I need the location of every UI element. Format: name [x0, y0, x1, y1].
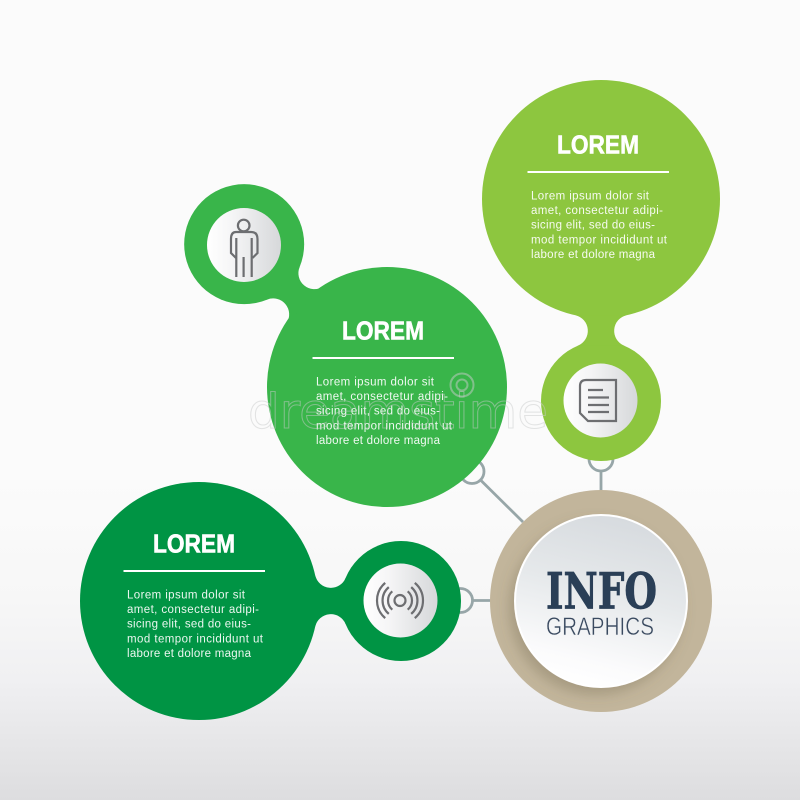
body text: Lorem ipsum dolor sit [316, 376, 435, 388]
body text: amet, consectetur adipi- [127, 604, 259, 616]
body text: labore et dolore magna [531, 249, 656, 261]
panel: central info hub [490, 490, 712, 712]
body text: Lorem ipsum dolor sit [127, 590, 246, 602]
body text: amet, consectetur adipi- [531, 205, 663, 217]
connector: left circle to hub [448, 588, 492, 612]
heading: LOREM [557, 129, 639, 159]
subtitle: GRAPHICS: GRAPHICS [546, 613, 654, 641]
body text [316, 376, 453, 447]
icon: person [207, 208, 281, 282]
panel: middle green node [117, 117, 557, 557]
body text: mod tempor incididunt ut [127, 633, 264, 645]
text block: bottom left [124, 528, 265, 660]
title: INFO: INFO [546, 562, 657, 620]
body text: mod tempor incididunt ut [531, 234, 668, 246]
body text: sicing elit, sed do eius- [127, 619, 251, 631]
panel: top right light green node [482, 80, 720, 461]
body text: labore et dolore magna [316, 435, 441, 447]
body text: mod tempor incididunt ut [316, 420, 453, 432]
panel: bottom left dark green node [80, 482, 461, 720]
body text: labore et dolore magna [127, 648, 252, 660]
heading: LOREM [153, 528, 235, 558]
body text: sicing elit, sed do eius- [316, 406, 440, 418]
body text: sicing elit, sed do eius- [531, 220, 655, 232]
body text [531, 190, 668, 261]
text block: middle [312, 315, 454, 447]
connector: top circle to hub [589, 447, 613, 492]
text block: top right [528, 129, 669, 261]
icon: signal [364, 564, 438, 638]
watermark: dreamstime [248, 384, 548, 440]
body text: Lorem ipsum dolor sit [531, 190, 650, 202]
icon: document [564, 364, 638, 438]
heading: LOREM [342, 315, 424, 345]
body text: amet, consectetur adipi- [316, 391, 448, 403]
connector: mid circle to hub [460, 460, 523, 522]
body text [127, 590, 264, 660]
